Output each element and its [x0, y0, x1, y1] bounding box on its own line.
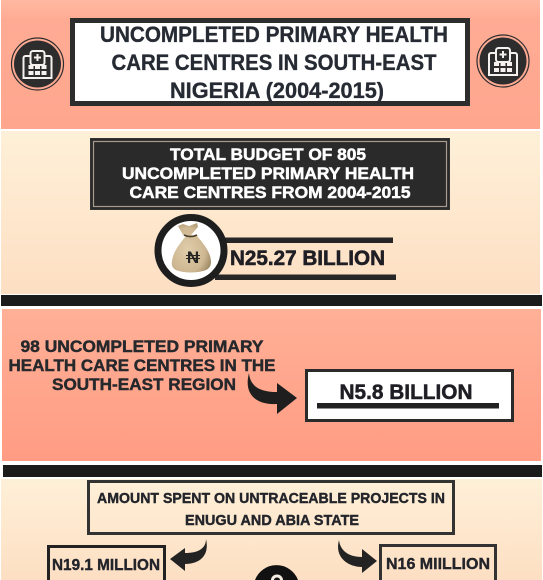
panel: untraceable projects [1, 479, 542, 580]
heading: total budget banner [90, 138, 450, 210]
value box: N5.8 BILLION [340, 381, 472, 404]
title: CARE CENTRES IN SOUTH-EAST [112, 50, 437, 75]
arrow left [170, 539, 207, 571]
arrow [248, 373, 297, 414]
icon: money bag [158, 218, 224, 284]
value box [306, 370, 512, 420]
budget value: N25.27 BILLION [230, 246, 385, 270]
text: 98 centres: HEALTH CARE CENTRES IN THE [8, 357, 276, 375]
divider bar [1, 295, 542, 306]
text: 98 centres: SOUTH-EAST REGION [52, 376, 236, 394]
title: NIGERIA (2004-2015) [170, 78, 384, 103]
panel: south-east region [2, 309, 541, 461]
panel: header [1, 0, 540, 129]
text: 98 centres: 98 UNCOMPLETED PRIMARY [20, 338, 264, 356]
icon: hospital right [477, 35, 529, 87]
heading: total budget banner: UNCOMPLETED PRIMARY HEALTH [122, 165, 414, 183]
title: UNCOMPLETED PRIMARY HEALTH [100, 22, 448, 47]
heading: total budget banner: TOTAL BUDGET OF 805 [170, 146, 366, 164]
arrow right [338, 540, 377, 573]
box: Abia: N16 MIILLION [386, 556, 490, 573]
box: Abia [380, 546, 496, 580]
heading box: AMOUNT SPENT ON UNTRACEABLE PROJECTS IN [97, 491, 445, 507]
heading box: ENUGU AND ABIA STATE [185, 513, 359, 529]
text: 98 centres [8, 338, 276, 394]
icon: black circle [255, 565, 298, 580]
heading: total budget banner: CARE CENTRES FROM 2004-2015 [130, 184, 410, 202]
heading box [88, 482, 454, 534]
divider bar [3, 465, 542, 477]
icon: hospital left [12, 38, 64, 90]
box: Enugu: N19.1 MILLION [52, 557, 160, 574]
panel: total budget [1, 131, 540, 294]
icon: money bag: N [187, 248, 199, 267]
box: Enugu [48, 546, 164, 580]
title [72, 20, 468, 104]
lines around budget figure [215, 238, 396, 280]
